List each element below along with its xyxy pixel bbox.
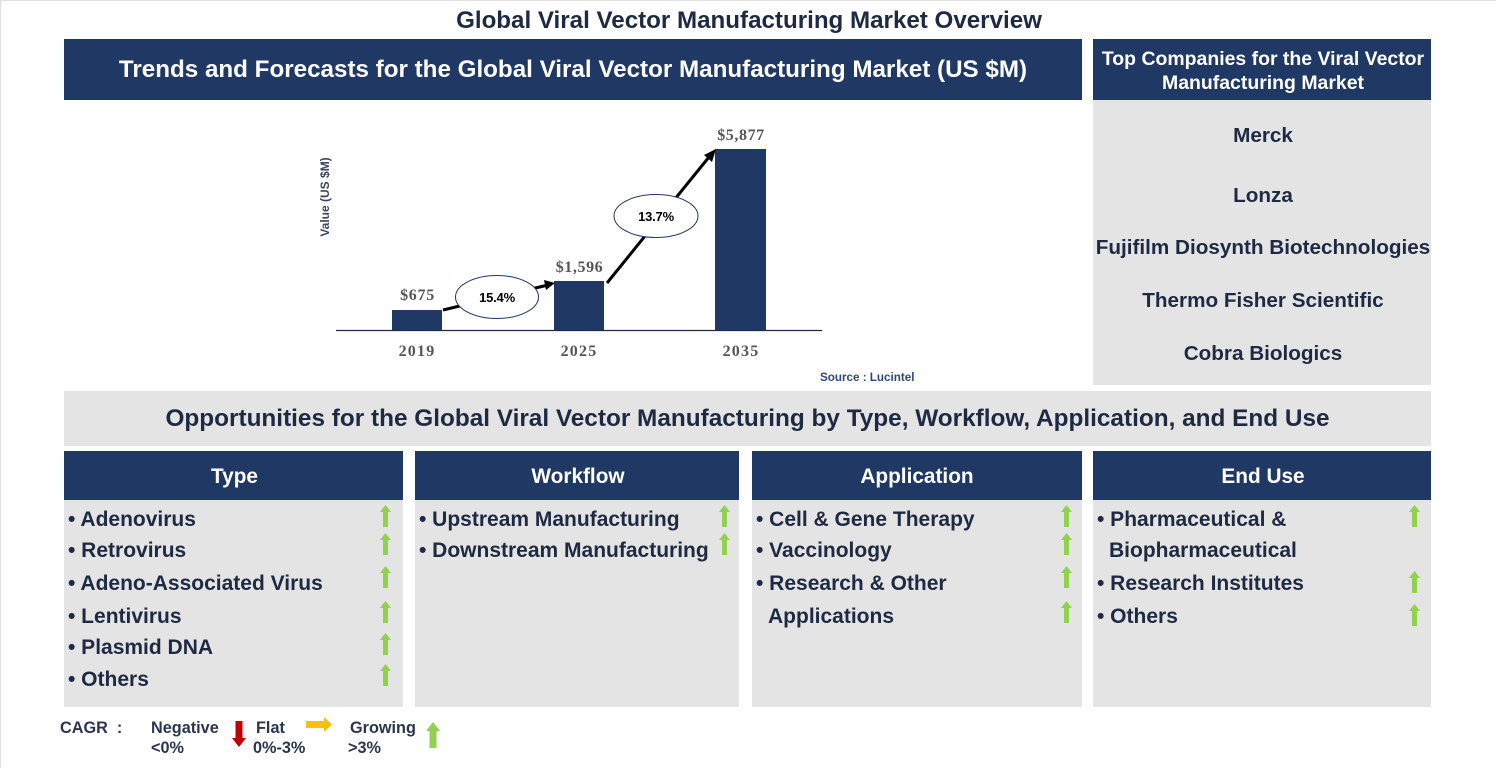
legend label: CAGR : bbox=[60, 719, 122, 737]
item: Vaccinology: • Vaccinology bbox=[756, 539, 892, 562]
company: Cobra Biologics: Cobra Biologics bbox=[1184, 342, 1342, 365]
Type header bbox=[64, 451, 405, 500]
bar 2019 bbox=[392, 310, 442, 330]
Type body bbox=[64, 500, 403, 707]
icon: red down arrow bbox=[232, 721, 246, 747]
CAGR bubble 15.4%: 15.4% bbox=[479, 290, 516, 305]
opportunities heading: Opportunities for the Global Viral Vector Manufacturing by Type, Workflow, Application, and End Use bbox=[165, 405, 1330, 432]
bar 2025 bbox=[554, 281, 604, 330]
arrow 2019 to 2025 bbox=[443, 280, 555, 310]
panel: top companies list bbox=[1093, 100, 1431, 385]
Application header: Application bbox=[860, 465, 974, 488]
item: Pharmaceutical & Biopharmaceutical: Biopharmaceutical bbox=[1109, 539, 1297, 562]
value label 2035: $5,877 bbox=[717, 127, 765, 144]
icon: growing arrow bbox=[1409, 604, 1420, 626]
Application header bbox=[752, 451, 1082, 500]
icon: growing arrow bbox=[1409, 505, 1420, 527]
legend: growing text: Growing bbox=[350, 719, 416, 737]
Workflow header bbox=[415, 451, 739, 500]
icon: growing arrow bbox=[380, 505, 391, 527]
panel: Application bbox=[752, 451, 1082, 707]
item: Research & Other Applications bbox=[756, 572, 947, 628]
icon: growing arrow bbox=[380, 533, 391, 555]
End Use header bbox=[1093, 451, 1431, 500]
year label 2019: 2019 bbox=[399, 343, 435, 360]
Type header: Type bbox=[211, 465, 258, 488]
Workflow header: Workflow bbox=[531, 465, 625, 488]
panel: Workflow bbox=[415, 451, 739, 707]
legend: growing text: >3% bbox=[348, 739, 381, 757]
company: Lonza: Lonza bbox=[1233, 184, 1293, 207]
panel header: trends and forecasts bbox=[64, 39, 1082, 100]
title: Global Viral Vector Manufacturing Market Overview bbox=[456, 7, 1042, 34]
item: Others: • Others bbox=[1097, 605, 1178, 628]
item: Research Institutes: • Research Institutes bbox=[1097, 572, 1304, 595]
panel header: top companies: Top Companies for the Viral Vector bbox=[1102, 48, 1424, 70]
item: Pharmaceutical & Biopharmaceutical: • Pharmaceutical & bbox=[1097, 508, 1286, 531]
company: Merck: Merck bbox=[1233, 124, 1293, 147]
item: Adenovirus: • Adenovirus bbox=[68, 508, 196, 531]
year label 2025: 2025 bbox=[561, 343, 597, 360]
legend: flat text bbox=[253, 719, 305, 757]
icon: amber right arrow bbox=[306, 717, 332, 732]
panel: End Use bbox=[1093, 451, 1431, 707]
value label 2025: $1,596 bbox=[556, 259, 603, 276]
panel header: top companies: Manufacturing Market bbox=[1162, 72, 1364, 94]
bar chart: market value 2019, 2025, 2035 bbox=[318, 127, 914, 384]
item: Pharmaceutical & Biopharmaceutical bbox=[1097, 508, 1297, 562]
value label 2019: $675 bbox=[400, 287, 435, 304]
icon: growing arrow bbox=[380, 664, 391, 686]
item: Adeno-Associated Virus: • Adeno-Associated Virus bbox=[68, 572, 323, 595]
panel header: top companies bbox=[1093, 39, 1431, 100]
legend: negative text bbox=[151, 719, 219, 757]
legend: growing text bbox=[348, 719, 416, 757]
legend: flat text: 0%-3% bbox=[253, 739, 305, 757]
item: Plasmid DNA: • Plasmid DNA bbox=[68, 636, 213, 659]
item: Research & Other Applications: • Research & Other bbox=[756, 572, 947, 595]
End Use body bbox=[1093, 500, 1431, 707]
baseline bbox=[336, 330, 822, 332]
legend: CAGR key bbox=[60, 717, 440, 757]
Workflow body bbox=[415, 500, 739, 707]
legend: negative text: Negative bbox=[151, 719, 219, 737]
page frame edge bbox=[0, 0, 1496, 1]
year label 2035: 2035 bbox=[723, 343, 759, 360]
icon: growing arrow bbox=[1061, 566, 1072, 588]
company: Fujifilm Diosynth Biotechnologies: Fujifilm Diosynth Biotechnologies bbox=[1096, 236, 1430, 259]
company: Thermo Fisher Scientific: Thermo Fisher Scientific bbox=[1142, 289, 1384, 312]
item: Downstream Manufacturing: • Downstream Manufacturing bbox=[419, 539, 709, 562]
icon: growing arrow bbox=[1409, 571, 1420, 593]
icon: growing arrow bbox=[380, 633, 391, 655]
legend: flat text: Flat bbox=[256, 719, 285, 737]
item: Upstream Manufacturing: • Upstream Manufacturing bbox=[419, 508, 680, 531]
icon: growing arrow bbox=[719, 505, 730, 527]
item: Research & Other Applications: Applications bbox=[768, 605, 894, 628]
CAGR bubble 13.7%: 13.7% bbox=[638, 209, 675, 224]
bar 2035 bbox=[715, 149, 766, 330]
icon: growing arrow bbox=[1061, 505, 1072, 527]
CAGR bubble 13.7% bbox=[614, 194, 698, 238]
opportunities heading bbox=[64, 391, 1431, 446]
item: Cell & Gene Therapy: • Cell & Gene Therapy bbox=[756, 508, 975, 531]
icon: growing arrow bbox=[1061, 533, 1072, 555]
icon: growing arrow bbox=[380, 601, 391, 623]
panel: Type bbox=[64, 451, 403, 707]
item: Retrovirus: • Retrovirus bbox=[68, 539, 186, 562]
icon: growing arrow bbox=[719, 533, 730, 555]
legend: negative text: <0% bbox=[151, 739, 184, 757]
axis title: Value (US $M) bbox=[318, 157, 332, 237]
item: Lentivirus: • Lentivirus bbox=[68, 605, 182, 628]
CAGR bubble 15.4% bbox=[456, 276, 538, 318]
source note: Source : Lucintel bbox=[820, 371, 914, 384]
arrow 2025 to 2035 bbox=[607, 149, 716, 283]
item: Others: • Others bbox=[68, 668, 149, 691]
End Use header: End Use bbox=[1221, 465, 1305, 488]
icon: growing arrow bbox=[380, 566, 391, 588]
Application body bbox=[752, 500, 1082, 707]
icon: green up arrow bbox=[426, 722, 440, 748]
icon: growing arrow bbox=[1061, 601, 1072, 623]
panel header: trends and forecasts: Trends and Forecasts for the Global Viral Vector Manufacturing Market (US $M) bbox=[119, 56, 1027, 83]
